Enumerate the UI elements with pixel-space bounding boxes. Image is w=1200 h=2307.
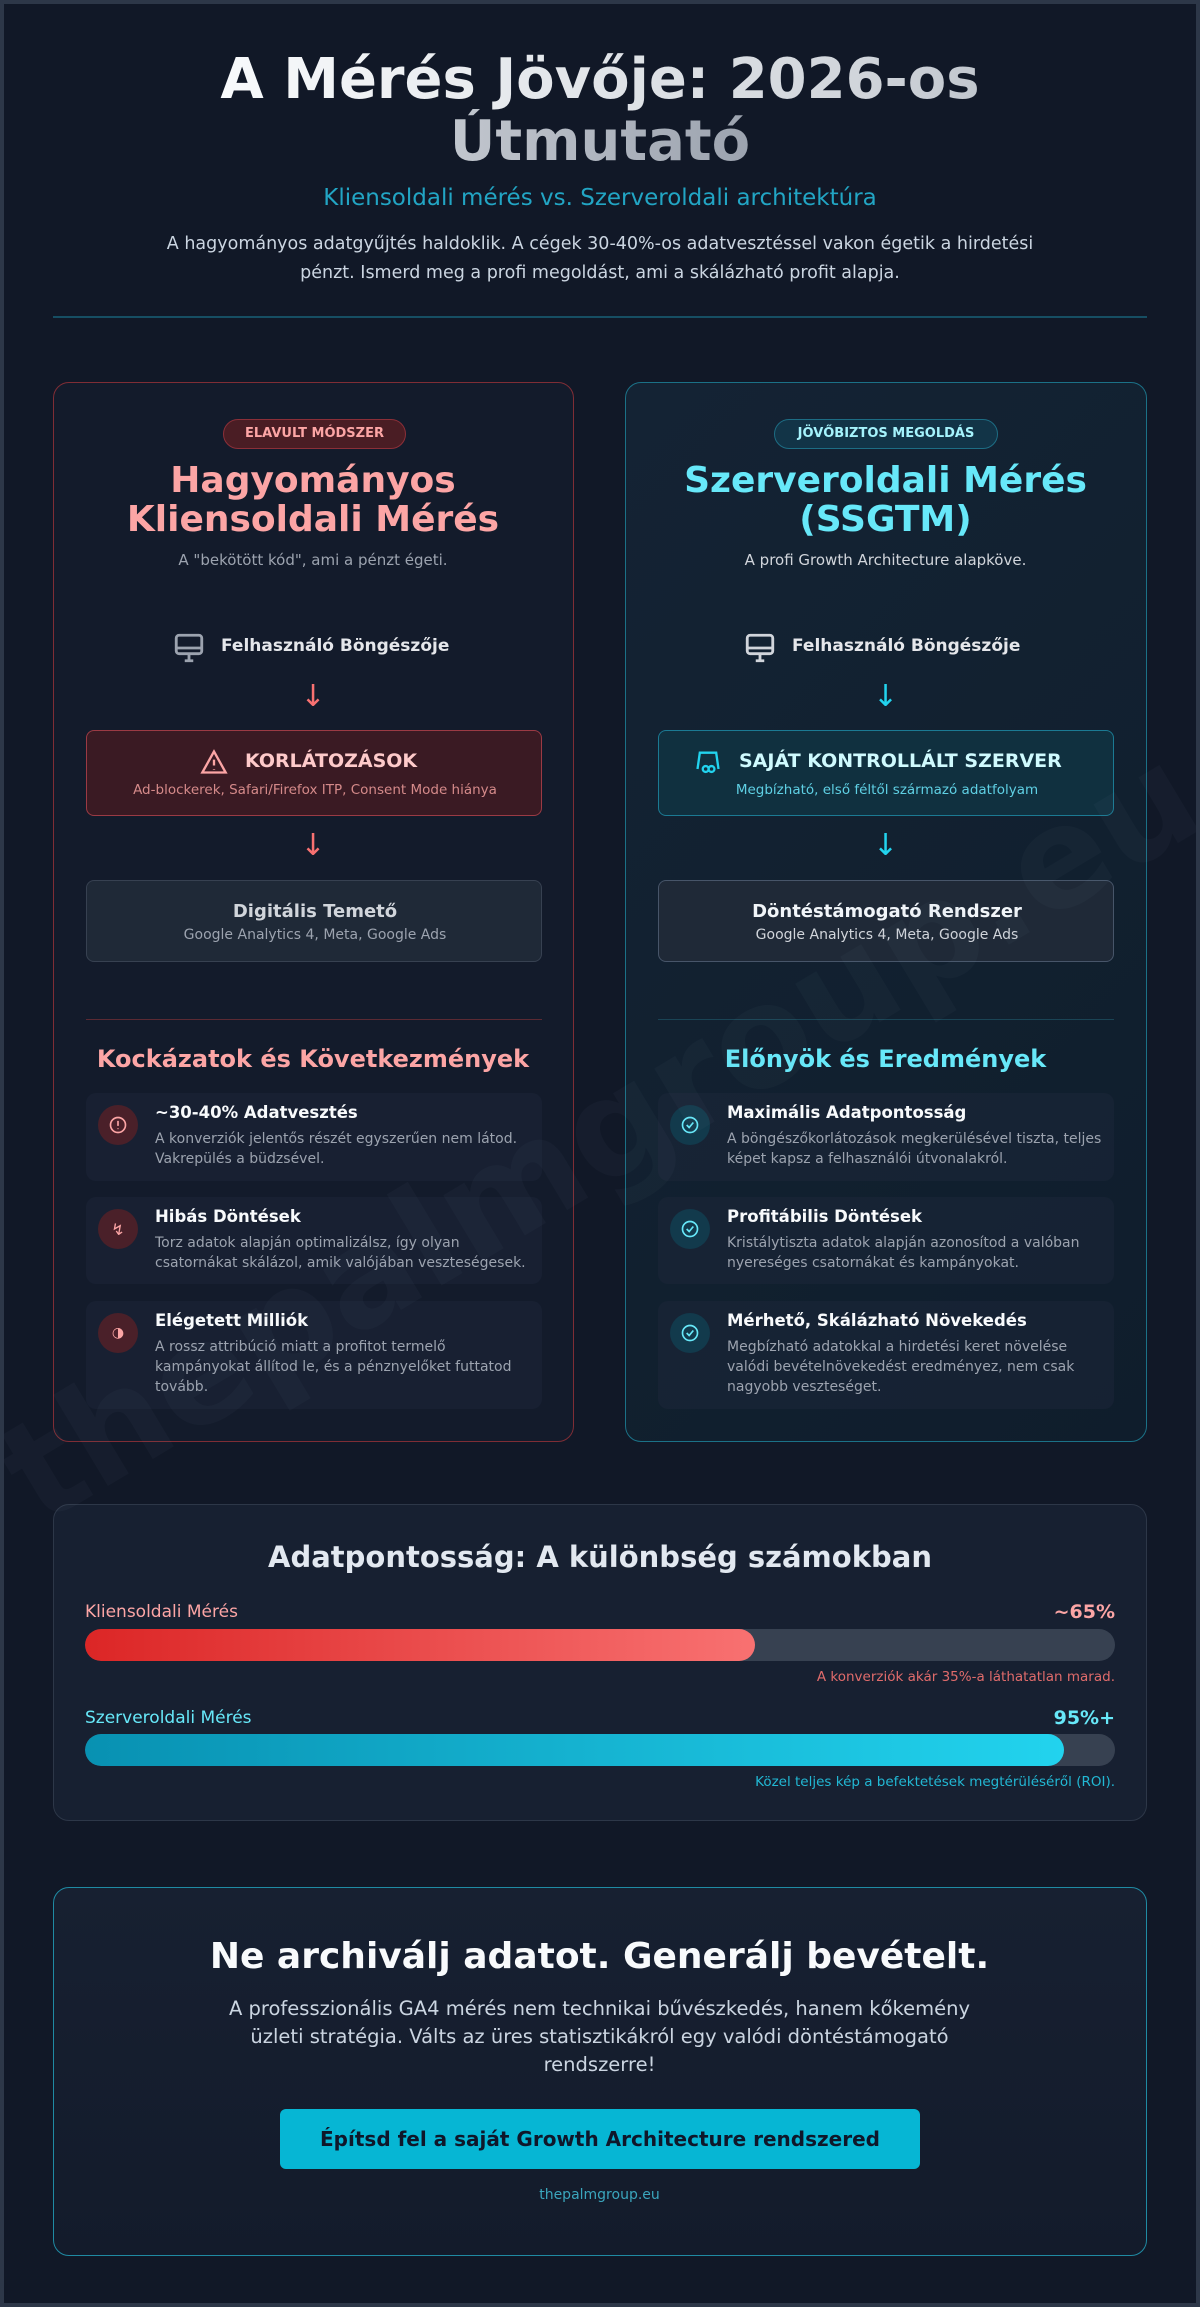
flow: browser: Felhasználó Böngészője (221, 636, 449, 656)
flow: browser: Felhasználó Böngészője (792, 636, 1020, 656)
item: accuracy: Maximális Adatpontosság (727, 1103, 966, 1122)
title (220, 47, 980, 174)
item: data loss: ~30-40% Adatvesztés (155, 1103, 358, 1122)
icon: warning (200, 749, 228, 774)
box: limitations (86, 730, 542, 816)
item: growth (658, 1301, 1114, 1409)
badge: jövőbiztos: JÖVŐBIZTOS MEGOLDÁS (798, 426, 974, 441)
panel: accuracy chart (53, 1504, 1147, 1821)
item: burned millions: ◑ (112, 1325, 124, 1341)
item: profitable decisions: Kristálytiszta adatok alapján azonosítod a valóban nyereséges csatornákat és kampányokat. (727, 1235, 1079, 1271)
box: digital graveyard: Google Analytics 4, Meta, Google Ads (184, 927, 446, 943)
item: profitable decisions: Profitábilis Döntések (727, 1207, 922, 1226)
box: own server: Megbízható, első féltől származó adatfolyam (736, 782, 1038, 798)
item: growth: Mérhető, Skálázható Növekedés (727, 1311, 1027, 1330)
item: profitable decisions (658, 1197, 1114, 1284)
flow: browser (746, 634, 1020, 662)
subheading: A "bekötött kód", ami a pénzt égeti. (178, 551, 448, 569)
badge: elavult: ELAVULT MÓDSZER (245, 426, 384, 441)
badge: elavult (223, 419, 406, 449)
box: digital graveyard: Digitális Temető (233, 901, 397, 922)
bar chart: Szerveroldali Mérés (85, 1708, 252, 1728)
arrow: ↓ (300, 828, 326, 863)
box: limitations: KORLÁTOZÁSOK (245, 750, 417, 772)
bar chart: Kliensoldali Mérés (85, 1602, 238, 1622)
icon: server (696, 752, 720, 774)
box: decision support (658, 880, 1114, 962)
item: bad decisions: ↯ (111, 1220, 125, 1238)
badge: jövőbiztos (774, 419, 998, 449)
heading: Kliensoldali Mérés (127, 499, 499, 540)
item: bad decisions (86, 1197, 542, 1284)
bar chart: ~65% (1054, 1601, 1115, 1623)
arrow: ↓ (873, 828, 898, 863)
chart heading: Adatpontosság: A különbség számokban (268, 1540, 932, 1574)
CTA text: A professzionális GA4 mérés nem technikai bűvészkedés, hanem kőkemény üzleti stratégia. Válts az üres statisztikákról egy valódi döntéstámogató rendszerre! (229, 1997, 970, 2076)
intro text: A hagyományos adatgyűjtés haldoklik. A cégek 30-40%-os adatvesztéssel vakon égetik a hirdetési pénzt. Ismerd meg a profi megoldást, ami a skálázható profit alapja. (167, 234, 1033, 283)
box: decision support: Google Analytics 4, Meta, Google Ads (756, 927, 1018, 943)
title: Útmutató (450, 109, 750, 174)
panel: client-side (53, 382, 574, 1442)
subheading: A profi Growth Architecture alapköve. (745, 551, 1026, 569)
icon: monitor (746, 634, 774, 662)
heading: Szerveroldali Mérés (684, 460, 1087, 501)
box: own server (658, 730, 1114, 816)
heading (684, 460, 1087, 540)
box: decision support: Döntéstámogató Rendszer (752, 901, 1022, 922)
bar chart: Közel teljes kép a befektetések megtérüléséről (ROI). (755, 1774, 1115, 1790)
heading: risks: Kockázatok és Következmények (97, 1045, 529, 1073)
arrow: ↓ (300, 679, 326, 714)
item: bad decisions: Hibás Döntések (155, 1207, 301, 1226)
heading: (SSGTM) (799, 499, 972, 540)
item: burned millions: A rossz attribúció miatt a profitot termelő kampányokat állítod le, és a pénznyelőket futtatod tovább. (155, 1339, 512, 1395)
item: burned millions (86, 1301, 542, 1409)
box: limitations: Ad-blockerek, Safari/Firefox ITP, Consent Mode hiánya (133, 782, 497, 798)
item: growth: Megbízható adatokkal a hirdetési keret növelése valódi bevételnövekedést eredményez, nem csak nagyobb veszteséget. (727, 1339, 1074, 1395)
icon: monitor (174, 634, 204, 662)
button: Építsd fel a saját Growth Architecture rendszered (320, 2127, 880, 2151)
panel: CTA (53, 1887, 1147, 2256)
website link: thepalmgroup.eu (539, 2187, 660, 2203)
item: data loss (86, 1093, 542, 1181)
box: digital graveyard (86, 880, 542, 962)
panel: server-side (625, 382, 1147, 1442)
heading: Hagyományos (170, 460, 456, 501)
item: bad decisions: Torz adatok alapján optimalizálsz, így olyan csatornákat skálázol, amik valójában veszteségesek. (155, 1235, 526, 1271)
bar chart (85, 1601, 1115, 1790)
bar chart: 95%+ (1054, 1707, 1115, 1729)
box: own server: SAJÁT KONTROLLÁLT SZERVER (739, 750, 1062, 772)
subtitle: Kliensoldali mérés vs. Szerveroldali architektúra (323, 185, 877, 211)
arrow: ↓ (873, 679, 898, 714)
heading (127, 460, 499, 540)
item: accuracy (658, 1093, 1114, 1181)
bar chart: A konverziók akár 35%-a láthatatlan marad. (817, 1669, 1115, 1685)
title: A Mérés Jövője: 2026-os (220, 47, 980, 112)
item: data loss: A konverziók jelentős részét egyszerűen nem látod. Vakrepülés a büdzsével. (155, 1131, 517, 1167)
flow: browser (174, 634, 449, 662)
item: accuracy: A böngészőkorlátozások megkerülésével tiszta, teljes képet kapsz a felhasználói útvonalakról. (727, 1131, 1101, 1167)
heading: benefits: Előnyök és Eredmények (725, 1045, 1046, 1073)
CTA heading: Ne archiválj adatot. Generálj bevételt. (210, 1936, 989, 1977)
button (280, 2109, 920, 2169)
item: burned millions: Elégetett Milliók (155, 1311, 308, 1330)
